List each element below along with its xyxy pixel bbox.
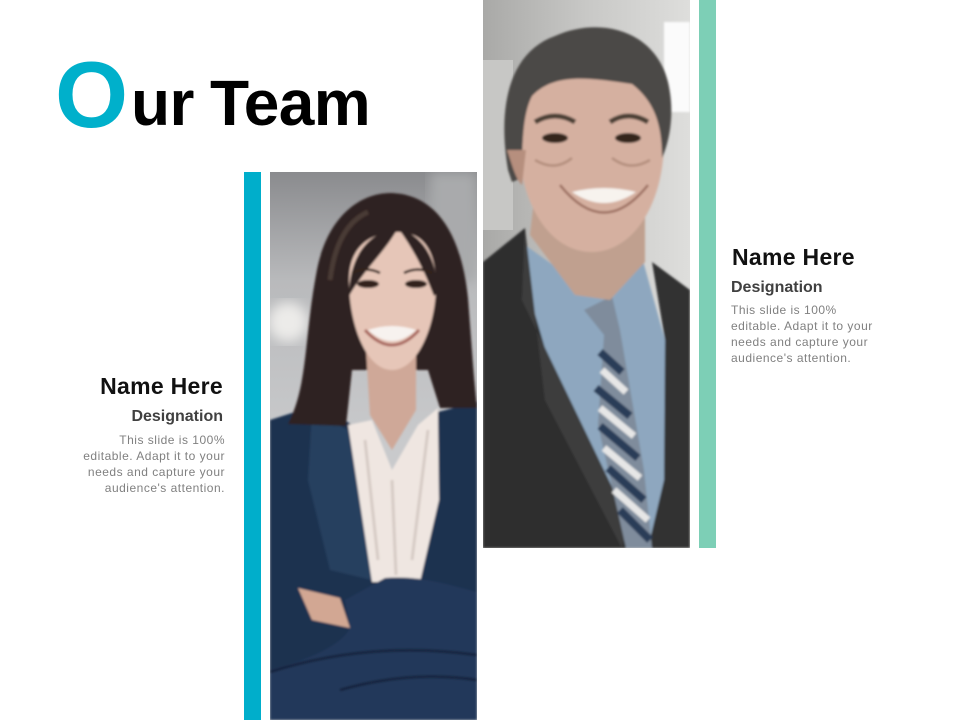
title <box>55 42 370 147</box>
name: Name Here <box>100 373 223 399</box>
face <box>518 62 664 252</box>
shirt <box>518 240 666 548</box>
jacket <box>483 228 628 548</box>
text block: left member <box>83 373 225 495</box>
text block: right member <box>731 244 873 365</box>
description: audience's attention. <box>105 481 225 495</box>
description: editable. Adapt it to your <box>83 449 225 463</box>
description: editable. Adapt it to your <box>731 319 873 333</box>
jacket <box>270 402 477 720</box>
photo: man <box>483 0 690 548</box>
description <box>83 433 225 495</box>
neck <box>366 350 416 450</box>
description: needs and capture your <box>88 465 225 479</box>
accent bar: teal blue <box>244 172 261 720</box>
designation: Designation <box>131 408 223 425</box>
description <box>731 303 873 365</box>
description: needs and capture your <box>731 335 868 349</box>
tie <box>584 296 652 548</box>
description: This slide is 100% <box>731 303 837 317</box>
description: audience's attention. <box>731 351 851 365</box>
description: This slide is 100% <box>119 433 225 447</box>
photo: woman <box>270 172 477 720</box>
blouse <box>348 408 439 582</box>
hair <box>288 193 477 426</box>
face <box>349 232 436 370</box>
title: O <box>55 42 128 147</box>
title: ur Team <box>131 67 370 139</box>
accent bar: mint <box>699 0 716 548</box>
crossed arms <box>270 577 477 720</box>
designation: Designation <box>731 279 823 296</box>
neck <box>530 190 645 300</box>
name: Name Here <box>732 244 855 270</box>
